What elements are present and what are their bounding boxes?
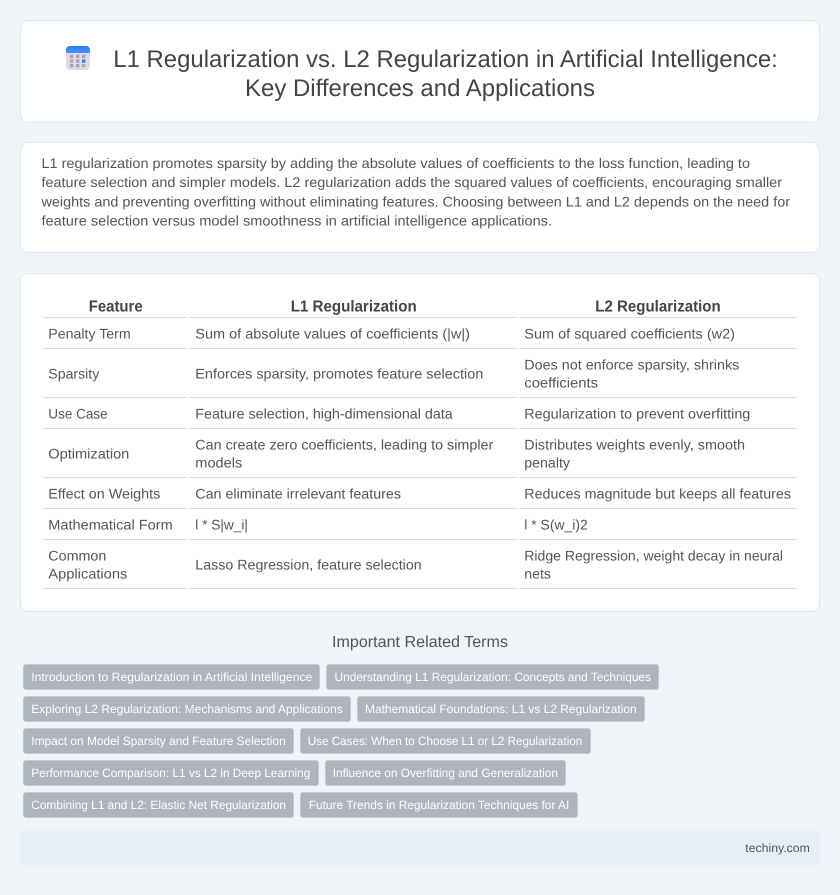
tag: mathematical foundations: [358, 696, 644, 722]
row: mathematical form: [43, 517, 797, 540]
table header row: L2 Regularization: [595, 298, 721, 315]
tag: use cases: Use Cases: When to Choose L1 or L2 Regularization: [308, 734, 582, 748]
tag: exploring L2: Exploring L2 Regularization: Mechanisms and Applications: [31, 702, 343, 716]
row: optimization: models: [195, 455, 242, 471]
row: common applications: [43, 548, 797, 588]
tag: understanding L1: [326, 664, 658, 690]
row: sparsity: [43, 356, 797, 398]
row: use case: [43, 406, 797, 428]
row: effect on weights: Effect on Weights: [48, 486, 160, 502]
row: common applications: nets: [524, 566, 551, 582]
tag: performance comparison: Performance Comparison: L1 vs L2 in Deep Learning: [31, 766, 310, 780]
tag: influence on overfitting: [326, 760, 566, 786]
tag: future trends: [300, 792, 578, 818]
icon: calendar: [66, 46, 90, 70]
row: use case: Regularization to prevent overfitting: [524, 406, 750, 422]
row: use case: Feature selection, high-dimensional data: [195, 406, 453, 422]
tag: elastic net: [24, 792, 294, 818]
row: effect on weights: [43, 486, 797, 508]
tag: elastic net: Combining L1 and L2: Elastic Net Regularization: [31, 798, 286, 812]
row: sparsity: Enforces sparsity, promotes feature selection: [195, 366, 483, 382]
tag: understanding L1: Understanding L1 Regularization: Concepts and Techniques: [334, 670, 651, 684]
row: mathematical form: l * S(w_i)2: [524, 517, 588, 533]
title: L1 Regularization vs. L2 Regularization in Artificial Intelligence:: [113, 46, 778, 73]
heading: important related terms: Important Related Terms: [332, 634, 508, 651]
tag: introduction: [24, 664, 320, 690]
row: effect on weights: Reduces magnitude but keeps all features: [524, 486, 791, 502]
row: mathematical form: Mathematical Form: [48, 517, 173, 533]
row: sparsity: Does not enforce sparsity, shrinks: [524, 356, 739, 372]
row: optimization: Optimization: [48, 446, 129, 462]
row: penalty term: Sum of absolute values of coefficients (|w|): [195, 326, 470, 342]
row: common applications: Applications: [48, 566, 127, 582]
tag: mathematical foundations: Mathematical Foundations: L1 vs L2 Regularization: [365, 702, 637, 716]
row: effect on weights: Can eliminate irrelevant features: [195, 486, 401, 502]
tag: exploring L2: [24, 696, 350, 722]
row: penalty term: Penalty Term: [48, 326, 131, 342]
row: penalty term: Sum of squared coefficients (w2): [524, 326, 735, 342]
row: common applications: Ridge Regression, weight decay in neural: [524, 548, 783, 564]
tag: impact on sparsity: [24, 728, 294, 754]
row: mathematical form: l * S|w_i|: [195, 517, 248, 533]
title: [113, 46, 778, 102]
row: optimization: Can create zero coefficients, leading to simpler: [195, 437, 494, 453]
tag: future trends: Future Trends in Regularization Techniques for AI: [309, 798, 569, 812]
row: optimization: Distributes weights evenly, smooth: [524, 437, 745, 453]
tag: use cases: [300, 728, 590, 754]
row: optimization: penalty: [524, 455, 570, 471]
row: optimization: [43, 437, 797, 478]
footer: [20, 831, 820, 865]
panel: comparison table: [20, 274, 820, 612]
panel: introduction text: L1 regularization promotes sparsity by adding the absolute values of coefficients to the loss function, leading to: [42, 155, 750, 171]
row: common applications: Lasso Regression, feature selection: [195, 557, 422, 573]
row: common applications: Common: [48, 548, 106, 564]
panel: introduction text: feature selection versus model smoothness in artificial intelligence applications.: [42, 212, 552, 228]
table header row: [43, 298, 797, 318]
table header row: Feature: [89, 298, 143, 315]
tag: performance comparison: [24, 760, 318, 786]
panel: introduction text: [20, 142, 820, 252]
title: Key Differences and Applications: [245, 75, 595, 102]
footer: techiny.com: [745, 841, 810, 855]
related term tags: [24, 664, 658, 818]
table header row: L1 Regularization: [291, 298, 417, 315]
tag: influence on overfitting: Influence on Overfitting and Generalization: [333, 766, 558, 780]
row: sparsity: Sparsity: [48, 366, 99, 382]
row: use case: Use Case: [48, 406, 108, 422]
row: penalty term: [43, 326, 797, 348]
tag: impact on sparsity: Impact on Model Sparsity and Feature Selection: [31, 734, 286, 748]
row: sparsity: coefficients: [524, 374, 598, 390]
tag: introduction: Introduction to Regularization in Artificial Intelligence: [31, 670, 313, 684]
panel: introduction text: feature selection and simpler models. L2 regularization adds the squared values of coefficients, encouraging smaller: [42, 174, 782, 190]
panel: introduction text: weights and preventing overfitting without eliminating features. Choosing between L1 and L2 depends on the need for: [40, 193, 790, 209]
panel: header: [20, 20, 820, 122]
